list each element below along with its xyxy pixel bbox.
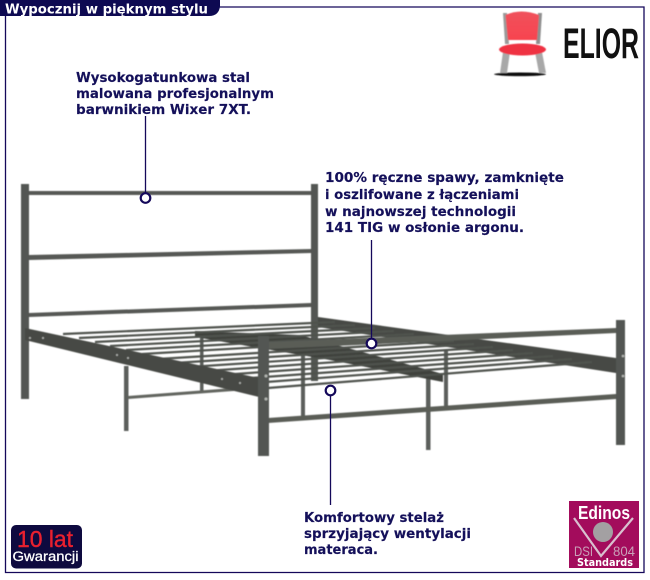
callout: welds: 100% ręczne spawy, zamknięte bbox=[325, 171, 564, 186]
badge: 10 year warranty: 10 lat bbox=[17, 526, 74, 552]
callout marker: headboard bbox=[141, 116, 150, 203]
callout marker: slats bbox=[326, 386, 335, 505]
badge: Edinos standards: 804 bbox=[613, 543, 635, 559]
badge: Edinos standards: DSI bbox=[574, 543, 593, 559]
callout: steel paint: malowana profesjonalnym bbox=[76, 87, 274, 102]
callout: welds: w najnowszej technologii bbox=[325, 205, 516, 220]
badge: Edinos standards: Standards bbox=[577, 556, 633, 569]
center support rail bbox=[195, 331, 443, 382]
headboard posts bbox=[21, 184, 318, 399]
right side rail bbox=[318, 317, 616, 373]
footboard rails bbox=[268, 328, 616, 423]
callout: welds: 141 TIG w osłonie argonu. bbox=[325, 221, 524, 236]
badge: Edinos standards bbox=[569, 501, 639, 569]
leg crossbar bbox=[128, 386, 260, 399]
icon: red chair logo bbox=[494, 12, 546, 76]
callout: slatted base: Komfortowy stelaż bbox=[304, 511, 444, 526]
callout: welds bbox=[325, 171, 564, 236]
post bolts bbox=[264, 355, 624, 400]
callout: steel paint: Wysokogatunkowa stal bbox=[76, 71, 250, 86]
bed slats bbox=[63, 322, 592, 388]
callout: slatted base: sprzyjający wentylacji bbox=[304, 527, 471, 542]
rear and center legs bbox=[124, 338, 448, 450]
badge: 10 year warranty: Gwarancji bbox=[12, 549, 78, 564]
callout marker: weld bbox=[367, 240, 376, 348]
badge: 10 year warranty bbox=[11, 525, 82, 568]
callout: steel paint: barwnikiem Wixer 7XT. bbox=[76, 103, 251, 118]
footboard posts bbox=[258, 320, 625, 456]
callout: welds: i oszlifowane z łączeniami bbox=[325, 188, 519, 203]
rail bolts bbox=[29, 337, 241, 384]
left side rail bbox=[25, 328, 259, 397]
callout: slatted base: materaca. bbox=[304, 543, 378, 558]
bed illustration bbox=[21, 184, 625, 456]
headboard rails bbox=[29, 191, 311, 317]
callout: steel paint bbox=[76, 71, 274, 118]
callout: slatted base bbox=[304, 511, 471, 558]
title: Wypocznij w pięknym stylu bbox=[5, 2, 208, 18]
badge: Edinos standards: Edinos bbox=[578, 503, 630, 523]
